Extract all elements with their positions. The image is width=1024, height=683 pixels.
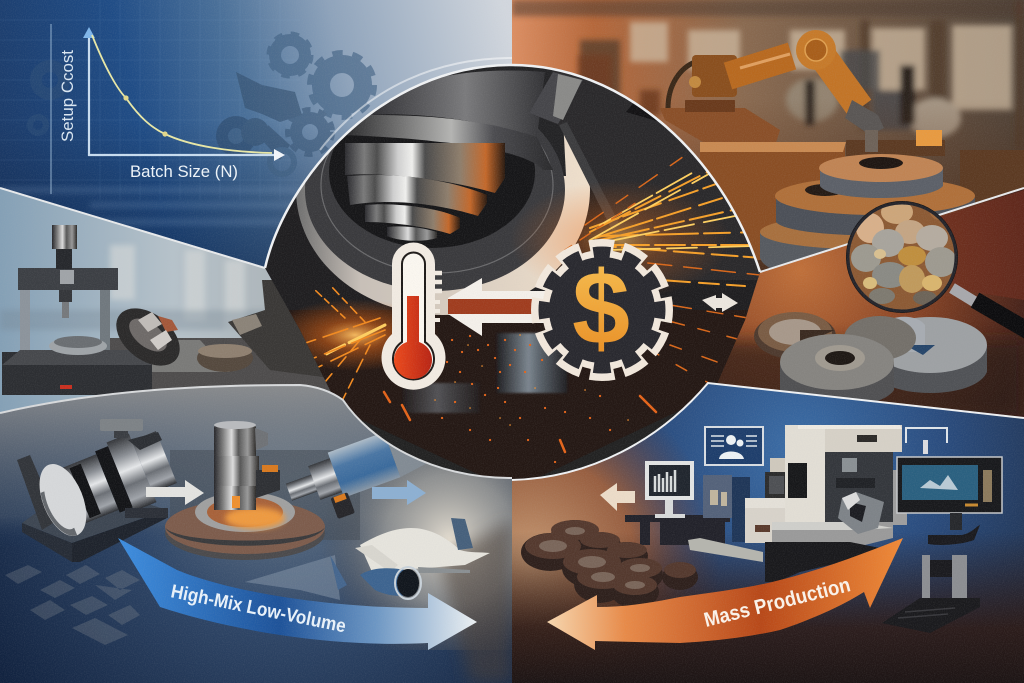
- background: misty windows: [1, 244, 265, 332]
- panel: setup cost chart: [0, 0, 512, 270]
- arrow: x axis: [274, 149, 285, 161]
- ring wheel: [754, 312, 836, 359]
- cnc machine: [745, 425, 907, 582]
- tool head: [214, 421, 280, 510]
- chart: setup cost curve: [58, 27, 285, 181]
- arrow: left flow: [600, 483, 635, 511]
- bearing assembly: [116, 308, 253, 372]
- cabinets: [703, 475, 750, 542]
- center border: [265, 65, 760, 272]
- lower machine column: [403, 333, 567, 413]
- disc workpiece: [165, 492, 325, 560]
- grinding nozzle: [286, 435, 426, 518]
- arrow: to workpiece: [372, 480, 426, 505]
- motor unit: [17, 419, 181, 562]
- grey grinding wheels: [780, 316, 987, 406]
- icon: thermometer: [382, 242, 446, 390]
- icon: faint left gears: [30, 66, 64, 133]
- operator touchscreen: [897, 457, 1002, 513]
- tile pattern: [5, 565, 140, 645]
- panel: precision equipment: [0, 189, 331, 412]
- robot arm: [668, 30, 884, 152]
- panel: abrasive wheel factory: [512, 0, 1024, 280]
- label: mass production: Mass Production: [702, 573, 853, 632]
- panel: high-mix low-volume: [0, 380, 512, 683]
- desk: [625, 515, 730, 545]
- divider line: [50, 24, 52, 194]
- panel: central grinding contact: [265, 70, 760, 479]
- arrow: to grinding head: [146, 480, 204, 505]
- panel: abrasive grains: [718, 189, 1024, 417]
- axis label: batch size: Batch Size (N): [130, 162, 238, 181]
- pile of steel rings: [521, 520, 698, 608]
- arrow: y axis: [83, 27, 95, 38]
- workpiece machinery: [228, 280, 324, 377]
- arrow: small center right: [702, 293, 738, 312]
- icon: jet aircraft: [245, 518, 490, 600]
- spindle: [341, 115, 553, 241]
- icon: dollar gear: [542, 250, 662, 370]
- label: high-mix low-volume: High-Mix Low-Volume: [169, 581, 348, 637]
- wheel guard: [529, 68, 770, 280]
- background: factory windows: [512, 0, 1024, 150]
- backing square: [170, 450, 360, 540]
- icon: magnifier over abrasive grains: [846, 200, 1024, 332]
- panel: mass production: [512, 380, 1024, 683]
- hood: [368, 71, 545, 137]
- glow: contact heat: [292, 301, 436, 369]
- grinding wheel: [296, 114, 590, 315]
- machine stand: [882, 513, 980, 633]
- presentation board icon: [705, 427, 763, 465]
- sparks: right spray: [564, 156, 760, 383]
- lower borders: [0, 385, 512, 478]
- curve: [92, 35, 272, 153]
- bracket icon: [906, 428, 947, 443]
- arrow: mass production: [547, 538, 903, 650]
- sparks: left spray: [306, 287, 386, 400]
- workbench: [660, 108, 1024, 260]
- label: dollar sign: $: [572, 251, 630, 367]
- arrow: high-mix low-volume: [118, 538, 477, 650]
- arrow: paired arrows toward thermometer: [448, 278, 545, 336]
- stacked grinding wheels: [760, 154, 975, 280]
- perforated bar: [688, 538, 763, 562]
- icon: background gears: [216, 36, 373, 174]
- measuring machine: [2, 225, 152, 395]
- sparks: lower embers: [384, 335, 656, 462]
- small monitor: [645, 461, 694, 518]
- axis label: setup cost: Setup Ccost: [58, 50, 77, 142]
